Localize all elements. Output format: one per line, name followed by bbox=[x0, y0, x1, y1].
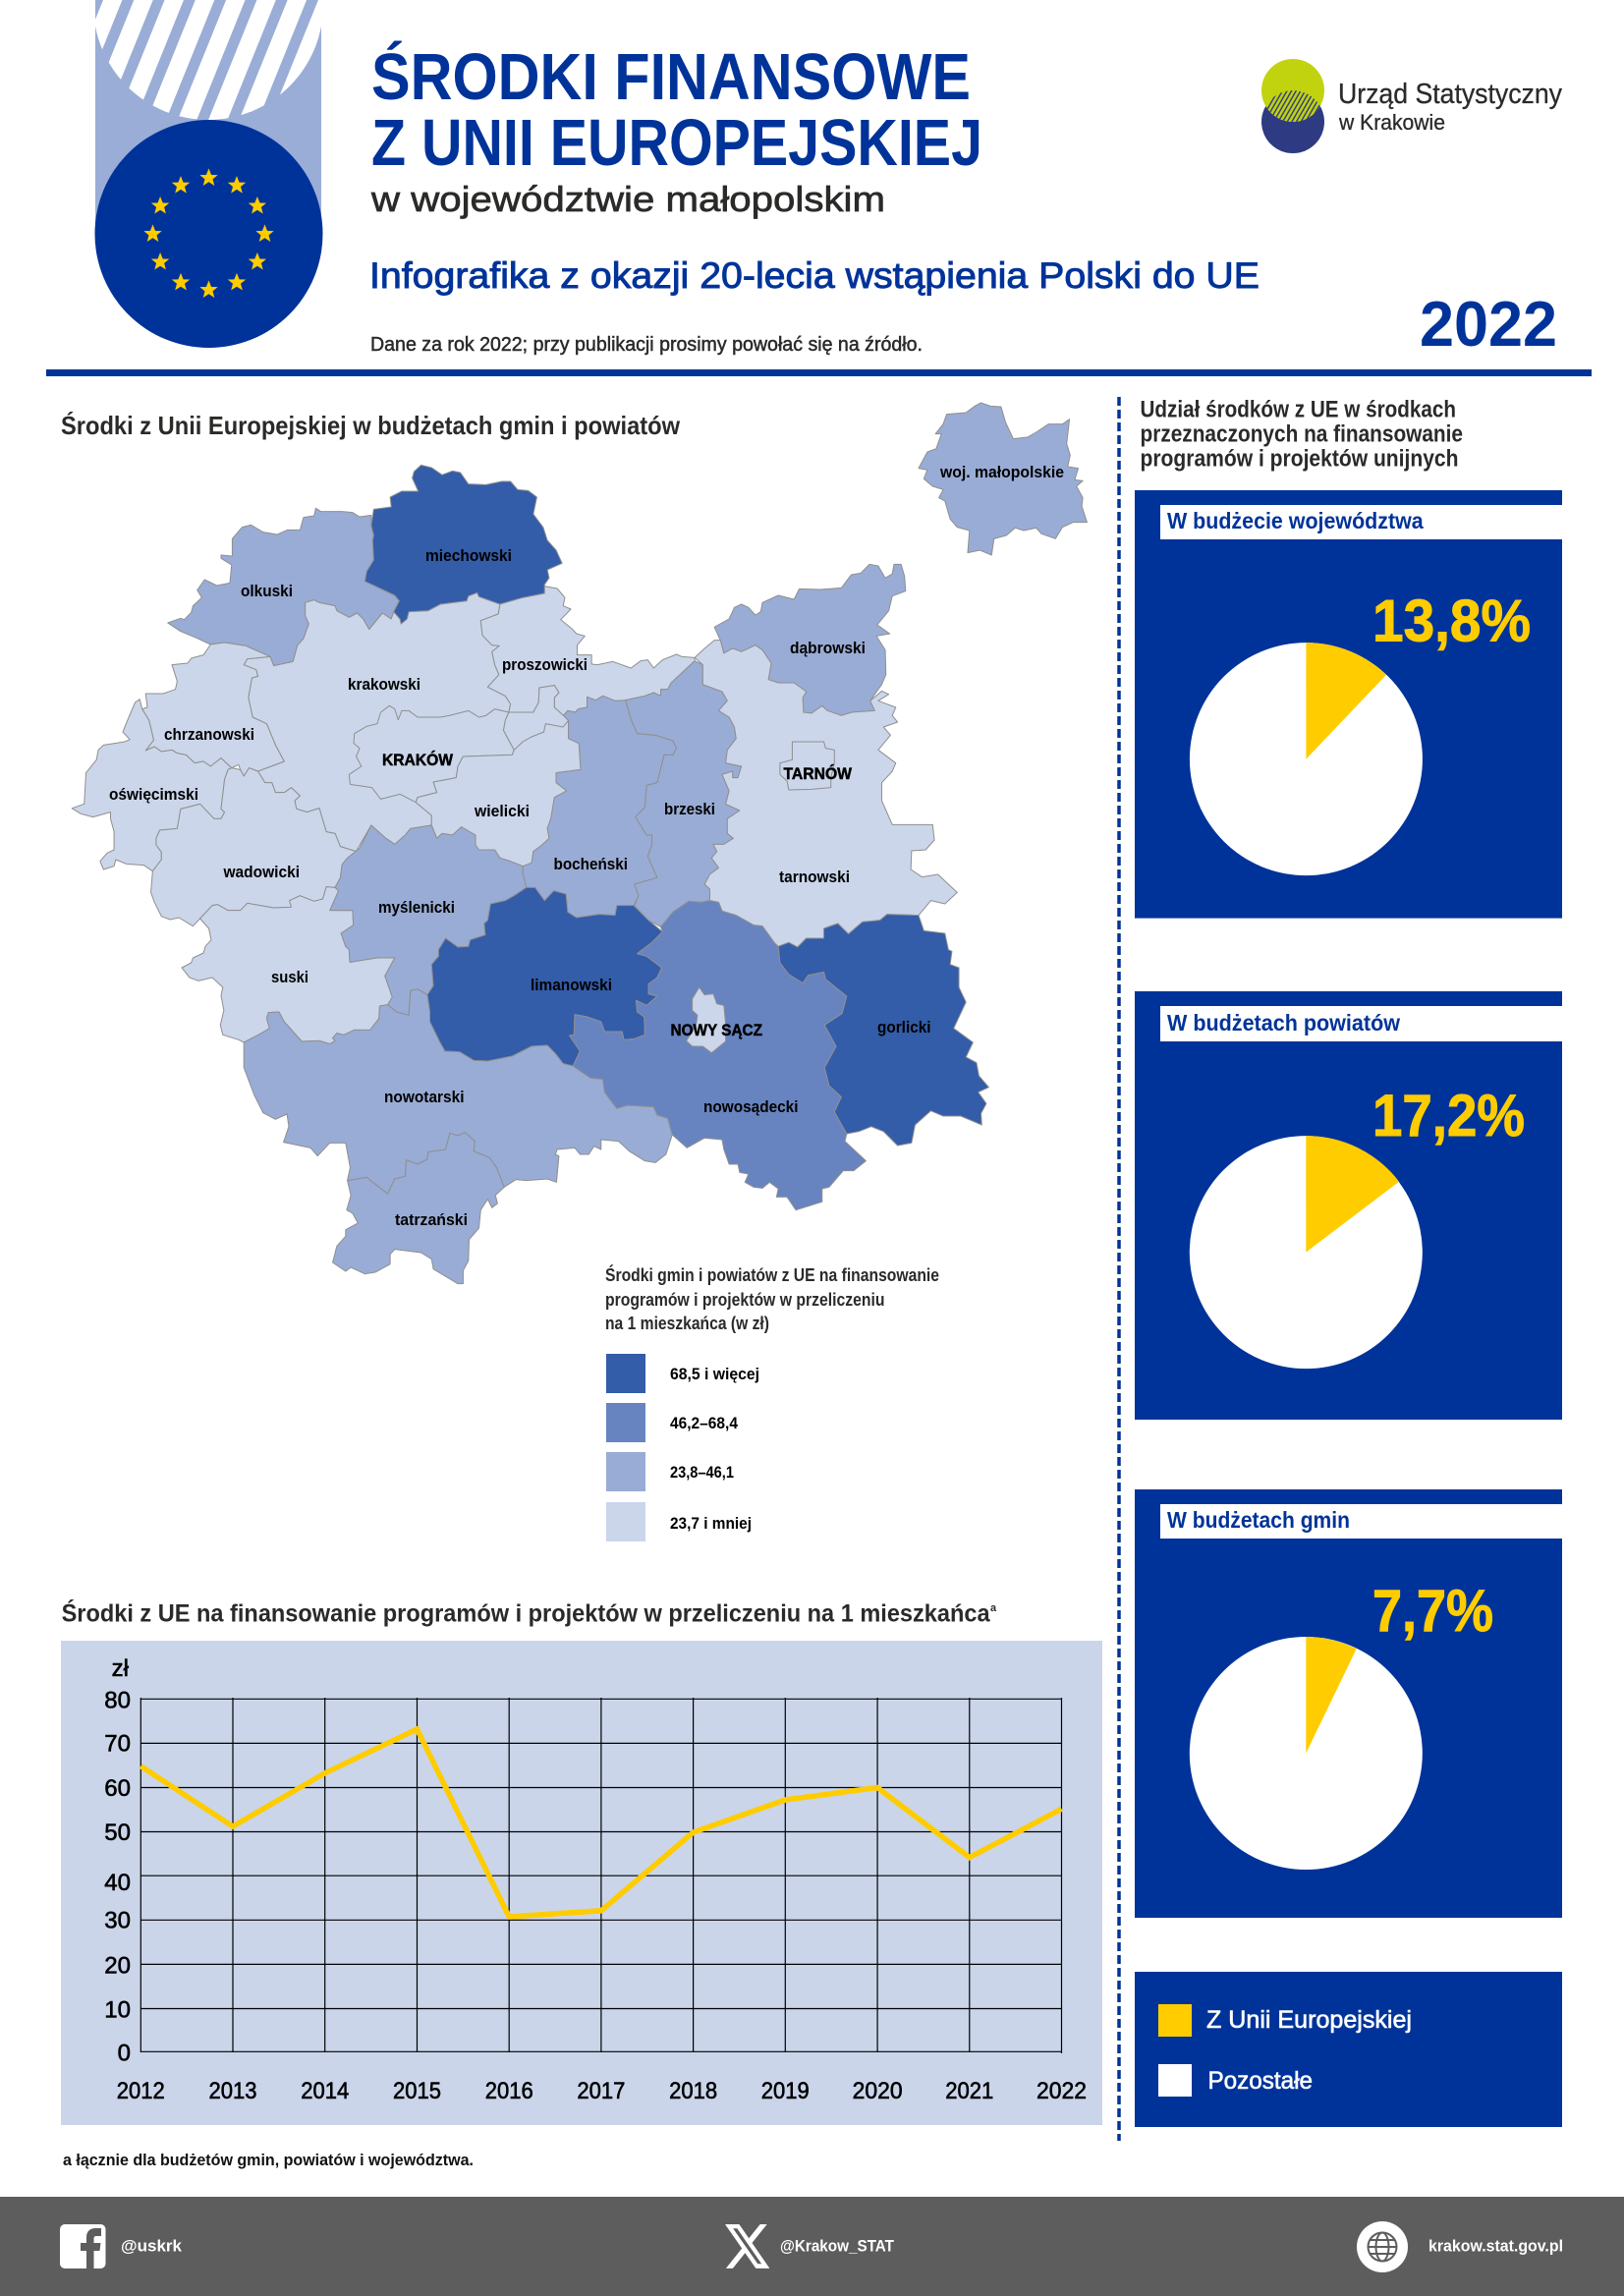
map labels: suski bbox=[271, 968, 308, 986]
map labels: tarnowski bbox=[779, 868, 850, 886]
region: bocheński bbox=[523, 696, 677, 918]
pie chart bbox=[1190, 1136, 1423, 1369]
region: nowotarski bbox=[244, 989, 672, 1194]
facebook handle: @uskrk bbox=[121, 2236, 183, 2256]
x axis labels: 2015 bbox=[393, 2078, 441, 2104]
subtitle: w województwie małopolskim bbox=[370, 179, 885, 219]
x axis labels: 2021 bbox=[945, 2078, 993, 2104]
choropleth map of powiats bbox=[72, 403, 1087, 1284]
region: gorlicki bbox=[778, 915, 988, 1146]
map labels: nowosądecki bbox=[703, 1097, 798, 1116]
legend labels: 68,5 i więcej bbox=[670, 1365, 759, 1383]
region: chrzanowski bbox=[142, 643, 284, 776]
region: proszowicki bbox=[480, 587, 695, 715]
map labels: tatrzański bbox=[395, 1210, 468, 1229]
X handle: @Krakow_STAT bbox=[780, 2236, 895, 2256]
logo mark bbox=[1261, 59, 1324, 153]
footnote: a łącznie dla budżetów gmin, powiatów i województwa. bbox=[63, 2151, 474, 2169]
x axis labels: 2016 bbox=[485, 2078, 533, 2104]
logo text: Urząd Statystyczny bbox=[1338, 79, 1562, 110]
region: oświęcimski bbox=[72, 700, 232, 871]
value: 7,7% bbox=[1372, 1578, 1493, 1644]
map heading: Środki z Unii Europejskiej w budżetach gmin i powiatów bbox=[61, 411, 681, 440]
map labels: bocheński bbox=[554, 855, 628, 873]
y axis labels: 70 bbox=[104, 1731, 131, 1758]
chart background bbox=[61, 1641, 1102, 2125]
map legend bbox=[605, 1264, 939, 1541]
title: Z UNII EUROPEJSKIEJ bbox=[371, 106, 982, 180]
footer bar bbox=[0, 2197, 1624, 2296]
y axis labels: 40 bbox=[104, 1870, 131, 1896]
region: miasto Kraków bbox=[349, 705, 514, 803]
website: krakow.stat.gov.pl bbox=[1428, 2236, 1563, 2256]
legend title bbox=[605, 1264, 939, 1333]
title bbox=[371, 40, 982, 180]
logo text bbox=[1338, 79, 1562, 135]
legend labels: 46,2–68,4 bbox=[670, 1414, 738, 1432]
source note: Dane za rok 2022; przy publikacji prosimy powołać się na źródło. bbox=[370, 334, 923, 356]
title: ŚRODKI FINANSOWE bbox=[371, 40, 971, 114]
right column heading bbox=[1140, 397, 1463, 473]
legend item: Pozostałe: Pozostałe bbox=[1208, 2067, 1313, 2095]
region: miasto Nowy Sącz bbox=[687, 987, 726, 1053]
legend labels bbox=[670, 1365, 759, 1533]
x axis labels bbox=[117, 2078, 1087, 2104]
legend title: na 1 mieszkańca (w zł) bbox=[605, 1313, 769, 1333]
region: brzeski bbox=[626, 661, 742, 926]
right column heading: Udział środków z UE w środkach bbox=[1140, 397, 1456, 423]
map labels: myślenicki bbox=[378, 898, 455, 917]
y axis labels: 60 bbox=[104, 1775, 131, 1802]
data line bbox=[140, 1729, 1062, 1917]
line chart heading: a bbox=[990, 1602, 997, 1614]
map labels bbox=[109, 463, 1064, 1229]
region: tarnowski bbox=[695, 641, 957, 947]
pie chart bbox=[1190, 643, 1423, 875]
map labels: KRAKÓW bbox=[382, 751, 454, 769]
region: krakowski bbox=[244, 592, 514, 852]
y axis labels bbox=[104, 1655, 131, 2066]
map labels: wielicki bbox=[474, 802, 530, 820]
legend swatches bbox=[606, 1354, 645, 1541]
logo text: w Krakowie bbox=[1338, 110, 1445, 135]
region: dąbrowski bbox=[714, 564, 906, 715]
panel header bbox=[1160, 1504, 1562, 1539]
line chart panel bbox=[61, 1641, 1102, 2125]
inset: województwo małopolskie bbox=[919, 403, 1087, 555]
map labels: TARNÓW bbox=[784, 764, 853, 783]
region: limanowski bbox=[427, 887, 662, 1066]
map labels: nowotarski bbox=[384, 1088, 464, 1106]
pie legend panel bbox=[1135, 1972, 1562, 2127]
icon: facebook bbox=[60, 2224, 106, 2268]
region: suski bbox=[182, 887, 395, 1044]
pie chart bbox=[1190, 1637, 1423, 1870]
right column heading: przeznaczonych na finansowanie bbox=[1140, 421, 1463, 448]
map labels: NOWY SĄCZ bbox=[670, 1021, 762, 1039]
map labels: olkuski bbox=[241, 582, 293, 600]
map labels: woj. małopolskie bbox=[939, 463, 1064, 481]
map labels: brzeski bbox=[664, 800, 715, 818]
panel header bbox=[1160, 505, 1562, 539]
year: 2022 bbox=[1420, 288, 1557, 360]
panel header: W budżetach powiatów bbox=[1167, 1010, 1400, 1036]
x axis labels: 2014 bbox=[301, 2078, 349, 2104]
y axis labels: zł bbox=[112, 1655, 130, 1682]
panel: budżety gmin bbox=[1135, 1489, 1562, 1918]
legend item: Z Unii Europejskiej bbox=[1158, 2004, 1412, 2037]
panel header: W budżecie województwa bbox=[1167, 508, 1424, 533]
map labels: miechowski bbox=[425, 546, 512, 565]
map labels: proszowicki bbox=[502, 655, 588, 674]
header rule bbox=[46, 369, 1592, 376]
x axis labels: 2012 bbox=[117, 2078, 165, 2104]
light blue band bbox=[95, 0, 321, 234]
y axis labels: 10 bbox=[104, 1996, 131, 2024]
map labels: wadowicki bbox=[223, 863, 300, 881]
map labels: dąbrowski bbox=[790, 639, 866, 657]
chart grid bbox=[140, 1698, 1062, 2053]
y axis labels: 20 bbox=[104, 1953, 131, 1979]
region: nowosądecki bbox=[570, 901, 866, 1210]
region: miasto Tarnów bbox=[780, 742, 834, 790]
x axis labels: 2017 bbox=[577, 2078, 625, 2104]
y axis labels: 0 bbox=[118, 2040, 131, 2066]
region: miechowski bbox=[364, 465, 562, 624]
region: olkuski bbox=[168, 508, 399, 666]
navy circle bbox=[94, 120, 322, 348]
x axis labels: 2013 bbox=[208, 2078, 257, 2104]
y axis labels: 80 bbox=[104, 1687, 131, 1713]
panel header bbox=[1160, 1006, 1562, 1041]
region: myślenicki bbox=[330, 825, 527, 1015]
x axis labels: 2022 bbox=[1036, 2078, 1087, 2104]
icon: X bbox=[725, 2224, 769, 2268]
panel header: W budżetach gmin bbox=[1167, 1507, 1350, 1533]
ring of twelve stars bbox=[143, 169, 274, 298]
logo: Urząd Statystyczny w Krakowie bbox=[1261, 59, 1562, 153]
legend title: programów i projektów w przeliczeniu bbox=[605, 1289, 884, 1310]
anniversary heading: Infografika z okazji 20-lecia wstąpienia Polski do UE bbox=[369, 255, 1260, 296]
x axis labels: 2019 bbox=[761, 2078, 810, 2104]
x axis labels: 2020 bbox=[853, 2078, 903, 2104]
legend labels: 23,7 i mniej bbox=[670, 1514, 752, 1533]
legend title: Środki gmin i powiatów z UE na finansowanie bbox=[605, 1264, 939, 1285]
vertical dashed divider bbox=[1117, 397, 1121, 2141]
value: 13,8% bbox=[1372, 588, 1531, 654]
right column heading: programów i projektów unijnych bbox=[1140, 446, 1458, 473]
legend labels: 23,8–46,1 bbox=[670, 1463, 734, 1482]
map labels: gorlicki bbox=[877, 1018, 931, 1036]
striped circle bbox=[95, 0, 321, 120]
region: tatrzański bbox=[333, 1133, 504, 1284]
line chart heading: Środki z UE na finansowanie programów i projektów w przeliczeniu na 1 mieszkańca bbox=[62, 1598, 991, 1628]
header graphic: EU flag medallion bbox=[94, 0, 322, 348]
legend item: Pozostałe bbox=[1158, 2064, 1313, 2097]
region: wadowicki bbox=[151, 768, 360, 926]
x axis labels: 2018 bbox=[669, 2078, 717, 2104]
icon: globe bbox=[1357, 2221, 1408, 2272]
map labels: chrzanowski bbox=[164, 725, 254, 744]
map labels: oświęcimski bbox=[109, 785, 198, 804]
region: wielicki bbox=[416, 686, 581, 867]
map labels: limanowski bbox=[531, 976, 612, 994]
y axis labels: 50 bbox=[104, 1820, 131, 1846]
panel: budżet województwa bbox=[1135, 490, 1562, 919]
map labels: krakowski bbox=[348, 675, 420, 694]
legend item: Z Unii Europejskiej: Z Unii Europejskiej bbox=[1206, 2006, 1412, 2034]
panel: budżety powiatów bbox=[1135, 991, 1562, 1420]
y axis labels: 30 bbox=[104, 1908, 131, 1934]
value: 17,2% bbox=[1372, 1083, 1525, 1148]
